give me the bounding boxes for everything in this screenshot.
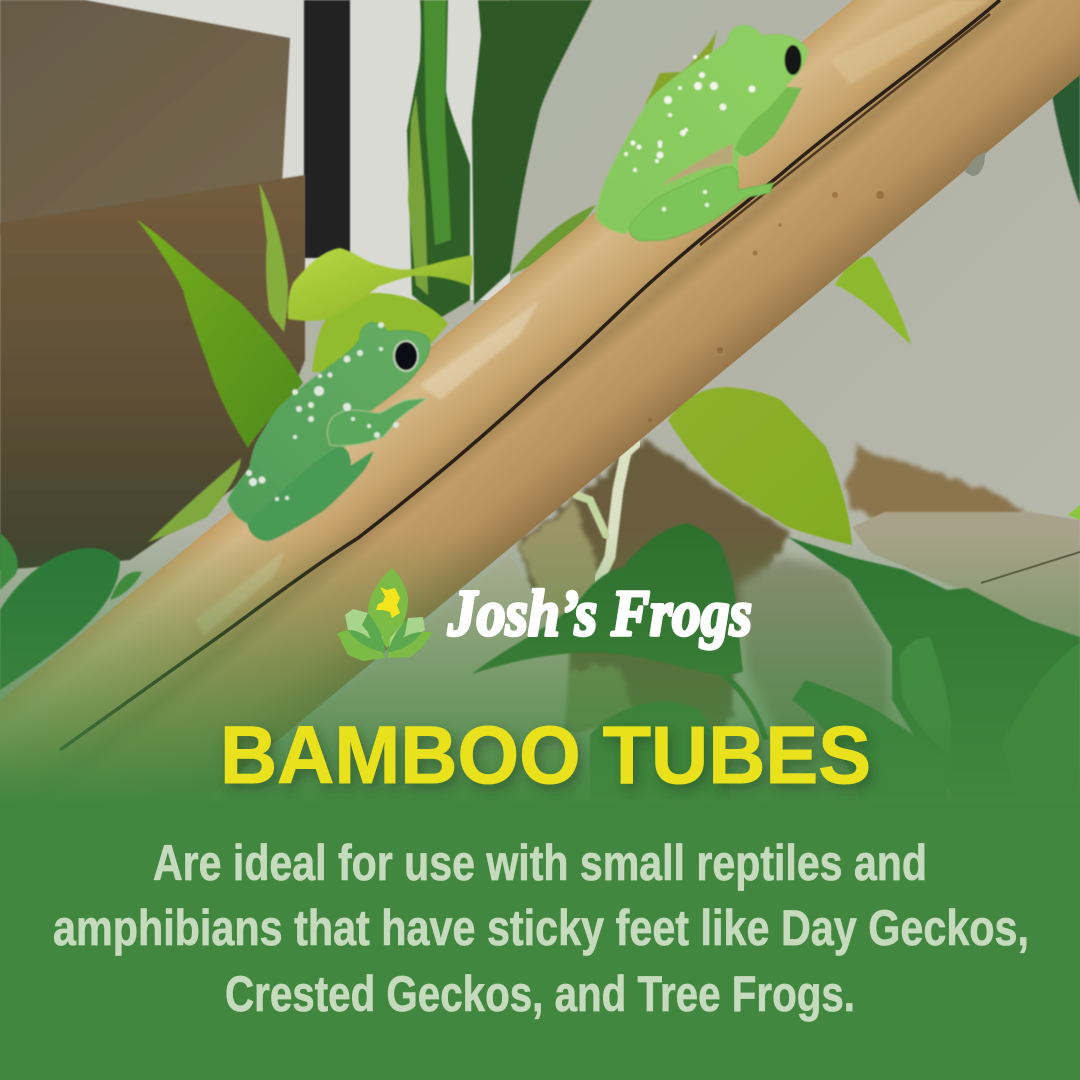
logo mark bbox=[337, 568, 433, 661]
top frog hind leg bbox=[629, 167, 773, 241]
top frog spots bbox=[624, 55, 756, 211]
centre dark leaf bbox=[472, 523, 743, 674]
top frog belly bbox=[660, 143, 733, 187]
foreground leaves bbox=[0, 523, 1080, 800]
bottom frog body bbox=[228, 323, 430, 523]
rock right bbox=[737, 557, 888, 760]
logo mid leaves bbox=[362, 613, 385, 654]
body text: Crested Geckos, and Tree Frogs. bbox=[225, 966, 855, 1022]
snake plant leaves bbox=[407, 0, 592, 318]
right leaf cluster bbox=[788, 537, 1080, 800]
bottom frog eye bbox=[394, 341, 418, 371]
cardboard lower panel bbox=[0, 175, 305, 570]
root stalk bbox=[599, 443, 636, 580]
frog bottom bbox=[228, 322, 430, 540]
logo frog bbox=[376, 587, 400, 618]
title: BAMBOO TUBES bbox=[220, 710, 871, 801]
logo lower leaves bbox=[337, 630, 385, 661]
tray crack line bbox=[981, 552, 1080, 583]
logo top leaf bbox=[368, 568, 408, 648]
tray right bbox=[852, 512, 1080, 637]
white wall strip bbox=[80, 0, 510, 300]
top frog front leg bbox=[735, 87, 802, 157]
top frog eye bbox=[784, 45, 802, 75]
logo light side leaves bbox=[345, 609, 383, 654]
body text bbox=[53, 835, 1029, 1022]
moss right bbox=[845, 445, 1030, 530]
frog top bbox=[597, 26, 807, 241]
cardboard upper panel bbox=[0, 0, 290, 235]
bamboo grain marks bbox=[648, 191, 884, 422]
bamboo crack bbox=[60, 0, 1000, 750]
small bright leaf at edge bbox=[1068, 505, 1080, 520]
green fade overlay bbox=[0, 530, 1080, 1080]
lower centre leaf bbox=[590, 702, 730, 800]
bottom frog front leg bbox=[327, 398, 427, 446]
body text: Are ideal for use with small reptiles and bbox=[153, 835, 927, 891]
tray lower bbox=[300, 555, 570, 800]
bottom frog hind leg bbox=[248, 448, 372, 540]
logo wordmark: Josh’s Frogs bbox=[447, 577, 752, 650]
top right dark leaf bbox=[1052, 72, 1080, 205]
pothos leaves behind bamboo bbox=[136, 30, 911, 545]
top frog body bbox=[597, 26, 807, 240]
black pillar bbox=[304, 0, 350, 258]
moss centre bbox=[520, 440, 790, 730]
bottom frog spots bbox=[246, 322, 399, 501]
water drop bbox=[965, 152, 985, 176]
bamboo highlight bbox=[420, 300, 540, 400]
